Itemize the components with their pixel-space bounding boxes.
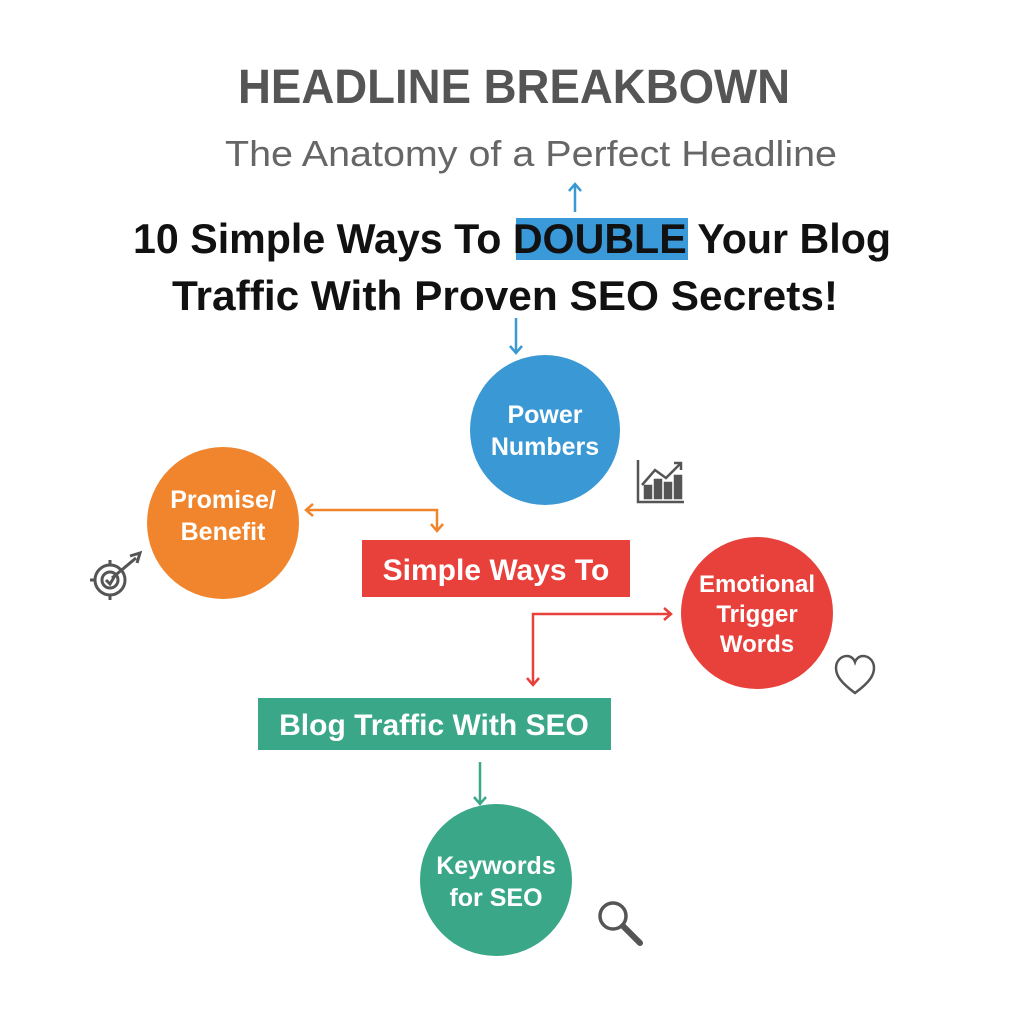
circle: power numbers <box>470 355 620 505</box>
circle: emotional trigger words <box>681 537 833 689</box>
circle: emotional trigger words: Trigger <box>716 601 798 628</box>
arrow: up to DOUBLE <box>569 184 581 212</box>
circle: promise/benefit: Promise/ <box>170 486 276 514</box>
circle: power numbers: Numbers <box>491 433 599 461</box>
icon: bar chart <box>638 460 684 502</box>
circle: emotional trigger words: Words <box>720 631 794 658</box>
highlight: DOUBLE <box>516 218 688 260</box>
circle: power numbers: Power <box>507 401 583 429</box>
circle: promise/benefit: Benefit <box>181 518 266 546</box>
headline <box>133 215 891 319</box>
headline: Traffic With Proven SEO Secrets! <box>172 272 838 319</box>
title: HEADLINE BREAKBOWN <box>238 61 790 114</box>
subtitle: The Anatomy of a Perfect Headline <box>225 133 837 174</box>
icon: magnifier <box>600 903 640 943</box>
arrow: orange connector <box>306 504 443 531</box>
box: blog traffic with seo <box>258 698 611 750</box>
circle: keywords for seo: Keywords <box>436 852 556 880</box>
arrow: red connector <box>527 608 671 685</box>
headline: 10 Simple Ways To DOUBLE Your Blog <box>133 215 891 262</box>
circle: promise/benefit <box>147 447 299 599</box>
box: simple ways to <box>362 540 630 597</box>
circle: keywords for seo: for SEO <box>449 884 543 912</box>
circle: emotional trigger words: Emotional <box>699 571 815 598</box>
box: simple ways to: Simple Ways To <box>383 554 609 587</box>
circle: keywords for seo <box>420 804 572 956</box>
arrow: down to power numbers <box>510 318 522 353</box>
icon: target <box>90 553 140 600</box>
icon: heart <box>836 656 874 693</box>
box: blog traffic with seo: Blog Traffic With SEO <box>279 709 589 742</box>
arrow: green down <box>474 762 486 804</box>
